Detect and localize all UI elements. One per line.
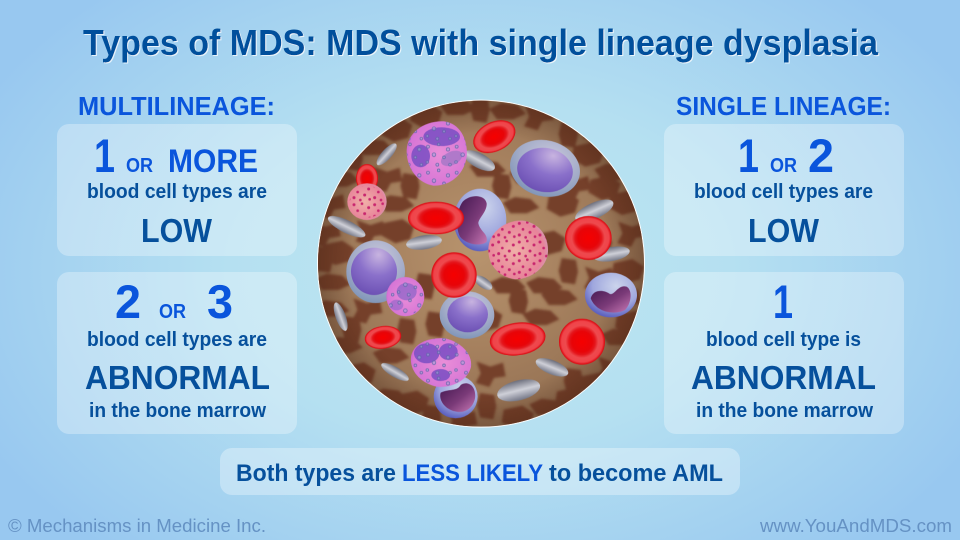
cell: large lymphoblast, left	[346, 240, 405, 303]
card: low counts, multilineage: LOW	[141, 212, 213, 249]
card: low counts, multilineage: MORE	[168, 143, 258, 179]
illustration: bone marrow blood cells	[311, 96, 647, 435]
cell: purple granulocyte, bottom	[411, 338, 471, 387]
card: low counts, multilineage	[57, 124, 297, 256]
cell: monocyte, centre	[454, 189, 506, 251]
card: low counts, single lineage	[664, 124, 904, 256]
footer: website: www.YouAndMDS.com	[759, 516, 952, 536]
card: abnormal marrow, single lineage: 1	[773, 275, 793, 328]
card: low counts, multilineage: OR	[126, 155, 154, 177]
cells: red blood cells	[364, 114, 611, 364]
callout: both types: LESS LIKELY	[402, 460, 543, 487]
callout: both types	[220, 448, 740, 495]
card: abnormal marrow, multilineage: in the bone marrow	[89, 400, 266, 422]
callout: both types: Both types are	[236, 460, 396, 487]
cell: pink granulocyte, small left	[347, 183, 387, 220]
cell: small lymphoblast, centre	[440, 291, 494, 339]
card: low counts, single lineage: LOW	[748, 212, 820, 249]
card: low counts, single lineage: OR	[770, 155, 798, 177]
heading: multilineage: MULTILINEAGE:	[78, 91, 275, 121]
card: low counts, single lineage: 2	[808, 129, 834, 182]
card: abnormal marrow, multilineage: ABNORMAL	[85, 359, 270, 396]
card: low counts, multilineage: 1	[94, 129, 115, 182]
card: abnormal marrow, single lineage: ABNORMAL	[691, 359, 876, 396]
card: abnormal marrow, single lineage: blood cell type is	[706, 329, 861, 351]
cell: monocyte, bottom	[434, 375, 478, 418]
cell: pink granulocyte, centre	[488, 221, 548, 279]
card: abnormal marrow, single lineage: in the bone marrow	[696, 400, 873, 422]
card: abnormal marrow, multilineage: blood cell types are	[87, 329, 267, 351]
cell: red blood cell behind neutrophil	[356, 164, 378, 192]
cell: purple granulocyte, top	[407, 121, 467, 186]
card: low counts, single lineage: 1	[738, 129, 759, 182]
cell: monocyte, right	[585, 273, 637, 317]
title: Types of MDS: MDS with single lineage dysplasia	[83, 22, 879, 63]
card: abnormal marrow, multilineage: OR	[159, 301, 187, 323]
panel: multilineage	[57, 91, 297, 434]
heading: single lineage: SINGLE LINEAGE:	[676, 91, 891, 121]
card: low counts, single lineage: blood cell types are	[694, 181, 873, 203]
callout: both types: to become AML	[549, 460, 723, 487]
card: abnormal marrow, single lineage	[664, 272, 904, 434]
cell: purple granulocyte, small left	[386, 277, 424, 316]
card: abnormal marrow, multilineage	[57, 272, 297, 434]
card: abnormal marrow, multilineage: 3	[207, 275, 233, 328]
footer: copyright: © Mechanisms in Medicine Inc.	[8, 516, 266, 536]
card: abnormal marrow, multilineage: 2	[115, 275, 141, 328]
cells: platelets	[325, 141, 631, 405]
cell: large lymphoblast, upper right	[504, 133, 586, 204]
panel: single lineage	[664, 91, 904, 434]
card: low counts, multilineage: blood cell types are	[87, 181, 267, 203]
